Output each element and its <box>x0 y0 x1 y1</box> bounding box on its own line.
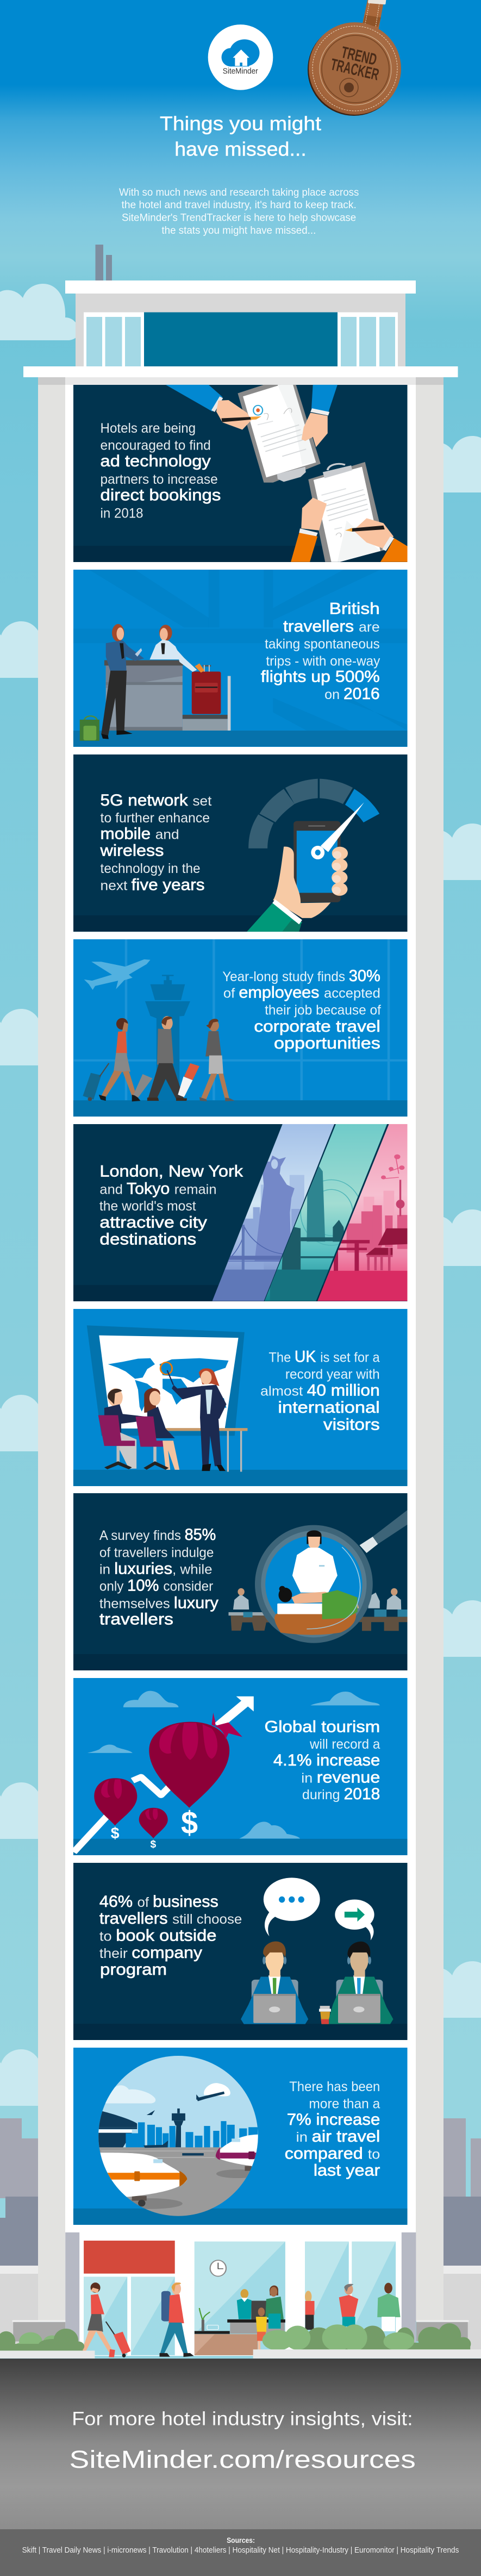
text: ad technology: in 2018 <box>101 506 143 521</box>
logo: SiteMinder <box>208 24 273 90</box>
text: ad technology: ad technology <box>101 452 211 470</box>
intro text: the hotel and travel industry, it's hard to keep track. <box>122 198 357 210</box>
text: British travellers: British <box>329 600 380 618</box>
text: global tourism: will record a <box>309 1737 380 1752</box>
sources band <box>0 2529 481 2576</box>
intro text: the stats you might have missed... <box>161 224 316 236</box>
panel 9: business travellers <box>73 1863 408 2040</box>
text: air travel: in air travel <box>296 2128 380 2145</box>
text: business travellers <box>99 1893 242 1979</box>
background therapists <box>228 1588 408 1631</box>
lobby window <box>195 2242 285 2355</box>
text: business travellers: to book outside <box>99 1926 216 1944</box>
title: Things you might <box>160 113 321 135</box>
text: ad technology: encouraged to find <box>101 438 211 453</box>
clouds <box>88 1691 380 1838</box>
text: luxury travellers: A survey finds 85% <box>99 1526 216 1544</box>
illustration: airport porthole <box>98 2056 259 2218</box>
speech bubble: arrow <box>335 1900 374 1941</box>
text: 5G network: to further enhance <box>101 810 210 826</box>
text: ad technology: Hotels are being <box>101 421 196 436</box>
reception desk <box>195 2301 285 2334</box>
footer call to action <box>0 2359 481 2529</box>
icon: cloud and house <box>222 39 259 66</box>
text: corporate travel: their job because of <box>265 1003 381 1018</box>
text: global tourism: 4.1% increase <box>273 1751 380 1769</box>
icon: plane silhouette <box>84 959 151 990</box>
text: luxury travellers: travellers <box>99 1610 173 1629</box>
tag strap <box>357 0 386 37</box>
balloons: $ <box>181 1805 198 1841</box>
text: British travellers: travellers are <box>283 618 380 635</box>
panel 10: air travel <box>73 2048 408 2225</box>
text: corporate travel: of employees accepted <box>223 983 380 1001</box>
text: UK visitors <box>260 1348 380 1433</box>
text: corporate travel: Year-long study finds 30% <box>222 967 380 985</box>
intro text: SiteMinder's TrendTracker is here to help showcase <box>122 211 356 223</box>
speech bubble: dots <box>264 1878 320 1936</box>
text: business travellers: 46% of business <box>99 1893 218 1911</box>
text: luxury travellers: of travellers indulge <box>99 1545 214 1561</box>
icon: wall clock <box>210 2260 226 2276</box>
text: British travellers <box>261 600 380 703</box>
text: British travellers: trips - with one-way <box>266 653 380 669</box>
footer heading: For more hotel industry insights, visit: <box>72 2409 413 2429</box>
arrow: rising trend <box>73 1696 254 1852</box>
people in lobby <box>237 2285 284 2350</box>
text: air travel <box>285 2079 380 2180</box>
text: city destinations: and Tokyo remain <box>99 1180 216 1197</box>
entrance glass <box>84 2276 175 2355</box>
left side city buildings <box>0 2118 38 2355</box>
chimneys <box>96 245 112 280</box>
text: air travel: compared to <box>285 2144 380 2162</box>
plane: orange nose <box>98 2153 187 2209</box>
text: luxury travellers: in luxuries, while <box>99 1560 213 1577</box>
illustration: presentation with world map <box>87 1325 247 1472</box>
text: corporate travel: opportunities <box>274 1034 380 1052</box>
text: 5G network: next five years <box>101 876 204 894</box>
red sign <box>84 2241 175 2274</box>
illustration: London band <box>261 1124 390 1301</box>
text: 5G network <box>100 791 212 894</box>
intro text <box>119 186 359 236</box>
text: air travel: There has been <box>289 2079 380 2094</box>
illustration: New York band <box>209 1124 338 1301</box>
text: UK visitors: The UK is set for a <box>268 1348 380 1365</box>
text: British travellers: taking spontaneous <box>265 637 380 652</box>
text: 5G network: 5G network set <box>101 791 212 809</box>
text: luxury travellers: only 10% consider <box>99 1576 214 1595</box>
person: seated woman <box>135 1388 179 1470</box>
tower body with pillars <box>38 377 443 2356</box>
title <box>160 113 321 160</box>
text: global tourism: in revenue <box>301 1768 380 1786</box>
panel 5: city destinations <box>73 1124 408 1301</box>
text: ad technology <box>101 421 221 521</box>
tag label: TRACKER <box>329 55 380 84</box>
text: corporate travel <box>222 967 381 1052</box>
text: luxury travellers: themselves luxury <box>99 1594 218 1612</box>
text: business travellers: their company <box>99 1944 202 1962</box>
text: ad technology: partners to increase <box>101 472 218 487</box>
bag <box>80 716 99 741</box>
text: British travellers: flights up 500% <box>261 668 380 686</box>
person: traveller <box>101 624 144 739</box>
text: UK visitors: record year with <box>285 1367 380 1382</box>
icon: control tower <box>172 2109 185 2147</box>
panel 1: ad technology <box>73 385 408 562</box>
text: 5G network: mobile and <box>101 825 179 843</box>
text: air travel: last year <box>314 2161 380 2180</box>
icon: control tower <box>145 975 190 1100</box>
sidewalk <box>0 2349 481 2359</box>
person: seated man <box>98 1388 144 1469</box>
icon: coffee cup <box>319 2006 331 2024</box>
text: UK visitors: almost 40 million <box>260 1381 380 1399</box>
illustration: spa row and magnifier <box>228 1510 408 1643</box>
balloons <box>94 1713 242 1850</box>
text: 5G network: wireless <box>100 841 164 860</box>
skyline <box>126 2121 258 2148</box>
text: city destinations: the world's most <box>99 1199 196 1214</box>
text: air travel: 7% increase <box>287 2111 380 2129</box>
text: city destinations <box>99 1162 243 1249</box>
intro text: With so much news and research taking place across <box>119 186 359 198</box>
plane: purple nose <box>216 2135 259 2178</box>
tag label <box>329 42 384 84</box>
panel 6: UK visitors <box>73 1309 408 1486</box>
panel 2: British travellers <box>73 570 408 747</box>
text: air travel: more than a <box>309 2097 380 2112</box>
person: backpacker <box>159 2282 194 2357</box>
text: global tourism: Global tourism <box>265 1718 380 1736</box>
hotel ground floor <box>0 2232 481 2359</box>
window mullions <box>73 939 408 1100</box>
text: ad technology: direct bookings <box>101 486 221 504</box>
text: business travellers: program <box>100 1961 167 1979</box>
panel 4: corporate travel <box>73 939 408 1117</box>
text: luxury travellers <box>99 1526 218 1629</box>
person: presenter <box>172 1368 227 1471</box>
text: UK visitors: international <box>278 1399 380 1417</box>
storefront side columns <box>65 2232 416 2351</box>
illustration: speed gauge and phone <box>247 779 379 932</box>
table <box>166 1428 247 1472</box>
right side city buildings <box>443 2118 481 2355</box>
low walls and ledges <box>13 2320 468 2341</box>
illustration: check-in desk <box>80 624 230 741</box>
flag pattern <box>73 570 408 731</box>
person: man in green <box>329 1942 393 2024</box>
world map <box>108 1358 228 1412</box>
right windows <box>305 2242 396 2338</box>
balloons: $ <box>151 1838 157 1850</box>
person: clerk <box>149 625 197 672</box>
footer link: SiteMinder.com/resources <box>70 2446 416 2473</box>
text: city destinations: London, New York <box>99 1162 243 1181</box>
panel 7: luxury travellers <box>73 1493 408 1670</box>
person: man in blue <box>241 1941 308 2024</box>
text: global tourism <box>265 1718 380 1803</box>
luggage tag: Trend Tracker <box>308 0 401 116</box>
text: corporate travel: corporate travel <box>254 1018 380 1036</box>
tag label: TREND <box>340 43 378 69</box>
panel 3: 5G network <box>73 754 408 932</box>
person: guests at right <box>305 2283 401 2331</box>
text: 5G network: technology in the <box>101 861 201 876</box>
text: city destinations: attractive city <box>99 1213 207 1231</box>
title: have missed... <box>174 138 307 160</box>
text: global tourism: during 2018 <box>302 1785 380 1803</box>
person: woman with suitcase <box>78 2282 130 2357</box>
illustration: contracts and hands <box>166 385 408 562</box>
illustration: Tokyo band <box>316 1124 408 1301</box>
people walking with luggage <box>83 1016 235 1101</box>
text: city destinations: destinations <box>99 1230 196 1249</box>
text: British travellers: on 2016 <box>324 685 380 703</box>
logo wordmark: SiteMinder <box>223 66 258 76</box>
rooftop penthouse <box>23 280 458 377</box>
text: business travellers: travellers still choose <box>99 1910 242 1928</box>
sources heading: Sources: <box>227 2537 255 2544</box>
panel 8: global tourism <box>73 1678 408 1855</box>
balloons: $ <box>111 1825 120 1842</box>
sky clouds along the tower <box>0 284 481 2106</box>
text: UK visitors: visitors <box>323 1415 380 1433</box>
bushes <box>0 2323 471 2353</box>
